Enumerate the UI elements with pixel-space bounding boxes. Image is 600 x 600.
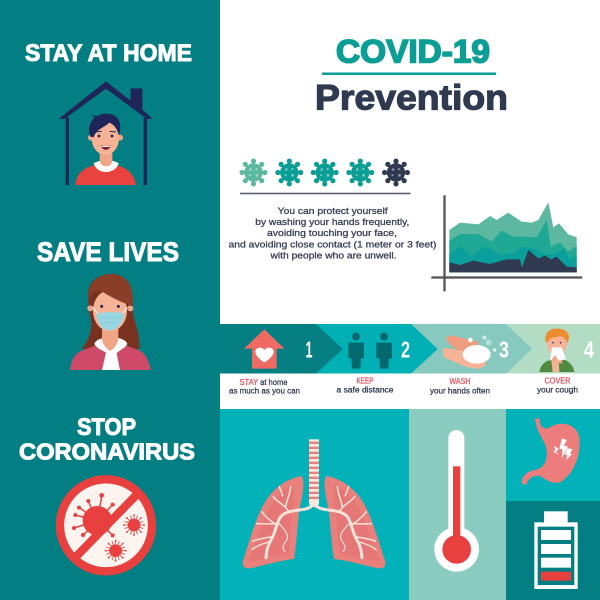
heading: stop coronavirus: STOP [77,414,136,441]
icon: low battery [534,511,578,589]
text block: prevention advice: by washing your hands frequently, [255,216,409,227]
panel: lungs [220,409,409,600]
panel: left teal column [0,0,220,600]
text block: prevention advice [228,205,436,260]
caption: wash your hands often: your hands often [430,386,490,396]
heading: save lives: SAVE LIVES [37,237,179,267]
icon: woman wearing mask [70,274,151,370]
icon: two people at safe distance [348,333,392,369]
icon: thermometer [434,430,479,572]
caption: keep a safe distance: a safe distance [336,386,394,395]
heading: stop coronavirus [19,414,195,464]
text block: prevention advice: and avoiding close contact (1 meter or 3 feet) [228,238,436,250]
icon: person covering cough [539,328,574,372]
arrow: step 2 to 3 [411,324,438,374]
panel: stomach [506,409,600,501]
panel: thermometer [409,409,506,600]
number 4: 4 [584,336,594,362]
heading: stay at home: STAY AT HOME [25,40,192,67]
icon: no coronavirus sign [60,479,152,571]
panel: battery [506,501,600,600]
arrow: step 1 to 2 [316,324,343,374]
divider under virus row [240,193,410,194]
number 2: 2 [401,336,410,362]
icon: stomach [522,418,580,485]
heading: stop coronavirus: CORONAVIRUS [19,438,195,464]
title underline [322,72,496,75]
icon: house with heart [244,329,284,369]
caption: cover your cough: your cough [537,386,578,395]
number 3: 3 [499,336,509,362]
caption: stay at home: STAY at home [240,378,288,387]
icon: lungs [243,439,385,568]
caption: keep a safe distance: KEEP [356,376,374,386]
panel: steps strip [220,324,600,374]
title: Prevention: Prevention [315,78,508,118]
title: COVID-19: COVID-19 [336,34,490,70]
icon: boy inside house [59,81,152,185]
arrow: step 3 to 4 [506,324,532,374]
caption: as much as you can: as much as you can [229,386,300,396]
text block: prevention advice: avoiding touching your face, [267,227,397,238]
icon: washing hands [443,335,496,369]
text block: prevention advice: with people who are unwell. [269,250,396,260]
caption: cover your cough: COVER [544,376,571,386]
virus icon row [240,158,410,186]
caption: wash your hands often: WASH [450,377,471,386]
caption: wash your hands often [430,377,490,396]
text block: prevention advice: You can protect yourself [278,205,388,216]
number 1: 1 [306,336,313,362]
caption: cover your cough [537,376,578,395]
caption: keep a safe distance [336,376,394,395]
area chart [431,195,582,291]
